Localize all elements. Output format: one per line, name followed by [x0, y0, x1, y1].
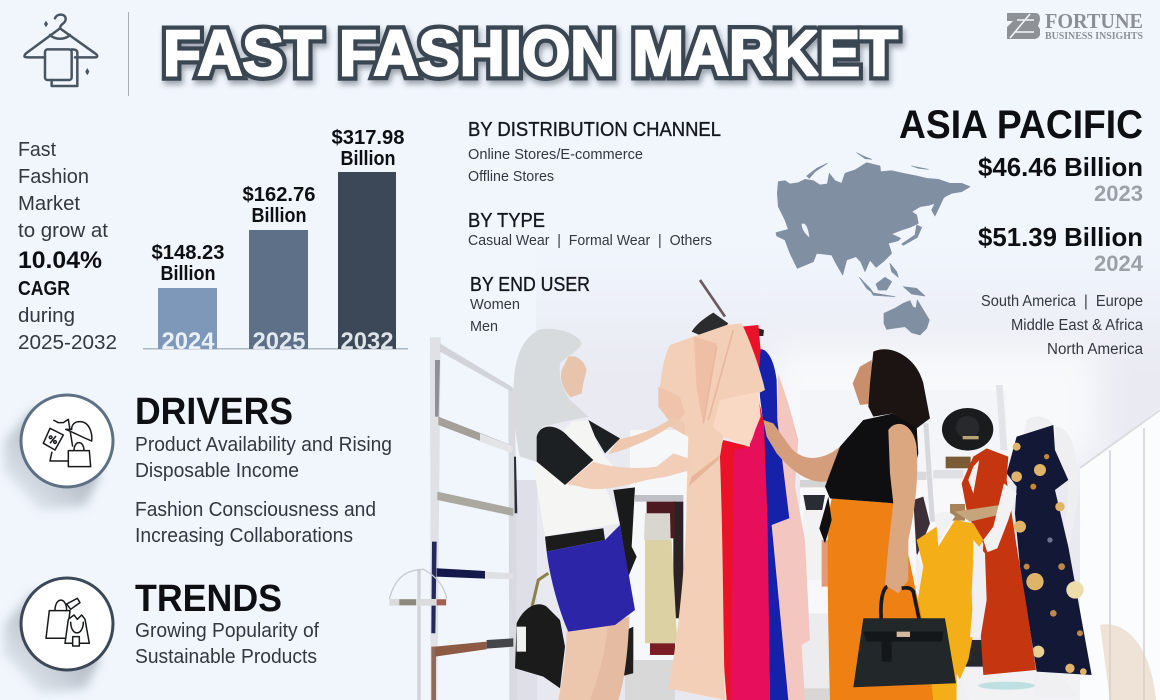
segments: distribution channel: Online Stores/E-commerce	[468, 146, 643, 163]
icon: shopping bags	[46, 598, 89, 646]
bar 2025	[242, 184, 316, 355]
bar 2025: 2025	[252, 328, 306, 355]
other regions	[981, 293, 1143, 358]
icon: clothing, tag and bag	[43, 419, 92, 467]
bar 2032: $317.98	[332, 127, 404, 149]
value 2023: $46.46 Billion	[978, 152, 1143, 182]
other regions: North America	[1047, 341, 1143, 358]
left shopper	[514, 329, 693, 700]
title: FAST FASHION MARKET	[163, 17, 898, 89]
panel: trends: Sustainable Products	[135, 646, 317, 668]
segments: type: Casual Wear | Formal Wear | Others	[468, 232, 712, 249]
black garment behind shopper	[613, 487, 637, 577]
left half of scene	[514, 280, 810, 700]
value 2024: 2024	[1094, 251, 1144, 276]
segments: end user: BY END USER	[470, 274, 590, 296]
glass railing	[1080, 408, 1160, 700]
logo: Fortune Business Insights	[1007, 9, 1143, 42]
panel: drivers: Fashion Consciousness and	[135, 499, 376, 521]
bar 2025: Billion	[252, 205, 306, 227]
logo: Fortune Business Insights: FORTUNE	[1045, 9, 1143, 33]
segments: type	[468, 210, 712, 249]
segments: end user	[470, 274, 590, 335]
panel: drivers: Product Availability and Rising	[135, 434, 392, 456]
value 2024: $51.39 Billion	[978, 222, 1143, 252]
mannequin in floral dress	[1007, 416, 1092, 697]
heading: Asia Pacific: ASIA PACIFIC	[899, 103, 1143, 147]
segments: distribution channel: BY DISTRIBUTION CHANNEL	[468, 119, 721, 141]
text block: growth summary: Fashion	[18, 166, 89, 188]
clothing rack	[620, 495, 683, 700]
panel: drivers	[135, 391, 392, 547]
panel: trends: TRENDS	[135, 578, 282, 620]
bar chart	[143, 127, 408, 355]
bar 2024	[152, 242, 224, 355]
title: FAST FASHION MARKET	[165, 21, 900, 93]
panel: drivers: Disposable Income	[135, 460, 299, 482]
bar 2032	[332, 127, 404, 355]
text block: growth summary: during	[18, 305, 75, 327]
bar 2032: Billion	[340, 148, 396, 170]
panel: trends	[135, 578, 319, 668]
value 2023	[978, 152, 1143, 206]
mannequin in red jumpsuit	[955, 448, 1036, 690]
other regions: South America | Europe	[981, 293, 1143, 310]
segments: distribution channel	[468, 119, 721, 185]
panel: drivers: DRIVERS	[135, 391, 293, 433]
bar 2024: $148.23	[152, 242, 224, 264]
right half of scene	[763, 349, 1092, 700]
icon: hanger with towel	[24, 15, 97, 86]
right shopper	[763, 349, 933, 700]
text block: growth summary: 2025-2032	[18, 332, 117, 354]
logo: Fortune Business Insights: BUSINESS INSIGHTS	[1045, 31, 1143, 42]
map: Asia Pacific	[776, 153, 970, 335]
region values	[899, 103, 1144, 358]
segments: distribution channel: Offline Stores	[468, 168, 554, 185]
mannequin in yellow dress	[915, 512, 987, 700]
text block: growth summary: CAGR	[18, 278, 70, 300]
value 2023: 2023	[1094, 181, 1143, 206]
bar 2032: 2032	[340, 328, 394, 355]
text block: growth summary: to grow at	[18, 220, 108, 242]
panel: drivers: Increasing Collaborations	[135, 525, 353, 547]
other regions: Middle East & Africa	[1011, 317, 1143, 334]
hangers	[700, 280, 725, 317]
black handbag	[853, 587, 956, 687]
mannequin hat	[942, 408, 993, 451]
panel: trends: Growing Popularity of	[135, 620, 319, 642]
black fringe handbag	[515, 573, 565, 688]
text block: growth summary: Market	[18, 193, 80, 215]
bar 2025: $162.76	[242, 184, 316, 206]
text block: growth summary	[18, 139, 117, 354]
bar 2024: Billion	[160, 263, 216, 285]
garments on rail	[658, 323, 810, 700]
photo: boutique shoppers	[389, 240, 1160, 700]
icon: drivers badge	[3, 395, 113, 510]
room background	[800, 385, 1080, 700]
segments: end user: Women	[470, 296, 520, 313]
segments: type: BY TYPE	[468, 210, 545, 232]
title: FAST FASHION MARKET	[163, 17, 898, 89]
icon: trends badge	[3, 578, 113, 693]
value 2024	[978, 222, 1144, 276]
text block: growth summary: Fast	[18, 139, 56, 161]
bar 2024: 2024	[162, 328, 215, 355]
divider	[128, 12, 129, 96]
text block: growth summary: 10.04%	[18, 247, 102, 274]
segments: end user: Men	[470, 318, 498, 335]
metal ladder shelf	[389, 337, 517, 700]
